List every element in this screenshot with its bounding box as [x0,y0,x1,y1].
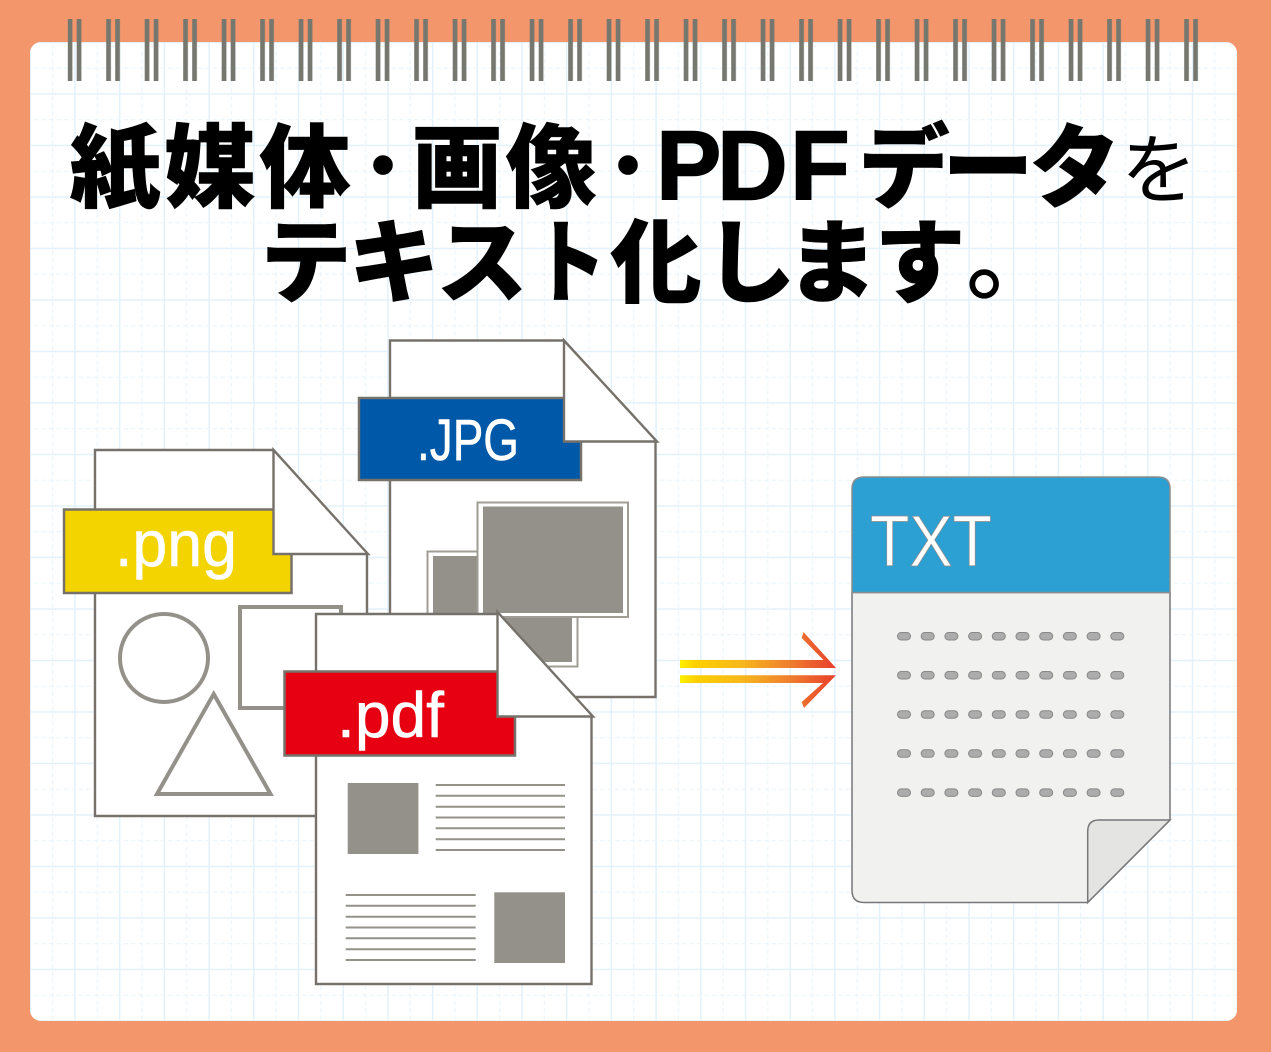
title: を [1121,109,1197,219]
title: ・ [349,112,417,211]
pdf label [284,672,515,756]
document: jpg [359,340,657,697]
title: 画像 [412,95,597,227]
jpg back photo [428,552,578,666]
document: pdf [284,612,593,984]
arrow [680,632,836,708]
png label [64,507,292,593]
pdf label: .pdf [337,679,444,751]
png label: .png [115,507,237,580]
png shape: triangle [157,694,270,794]
spiral binding rings [68,19,1199,81]
document: png [64,450,368,816]
pdf top image [348,783,418,854]
txt dotted lines [898,632,1124,796]
pdf bottom image [494,892,565,963]
png shape: rectangle [240,607,341,708]
jpg front photo [478,502,628,617]
title: 化します [610,190,966,322]
txt label: TXT [870,502,992,582]
title: 。 [966,184,1060,320]
txt page curl [1088,820,1170,902]
title: ト [533,189,606,322]
title: 紙媒体 [70,95,351,227]
txt header [852,477,1170,592]
title: ・ [594,112,662,211]
png shape: circle [120,614,208,702]
title: テキス [260,190,528,322]
title: データ [858,95,1121,227]
jpg fold [564,340,657,442]
title: PDF [656,110,850,220]
txt page body [852,592,1170,902]
pdf fold [498,612,593,716]
jpg label [359,398,581,480]
title [70,95,1197,322]
pdf bottom text lines [346,895,476,960]
pdf top text lines [436,785,565,850]
jpg label: .JPG [417,408,519,473]
document: txt [852,477,1170,902]
png fold [274,450,368,554]
